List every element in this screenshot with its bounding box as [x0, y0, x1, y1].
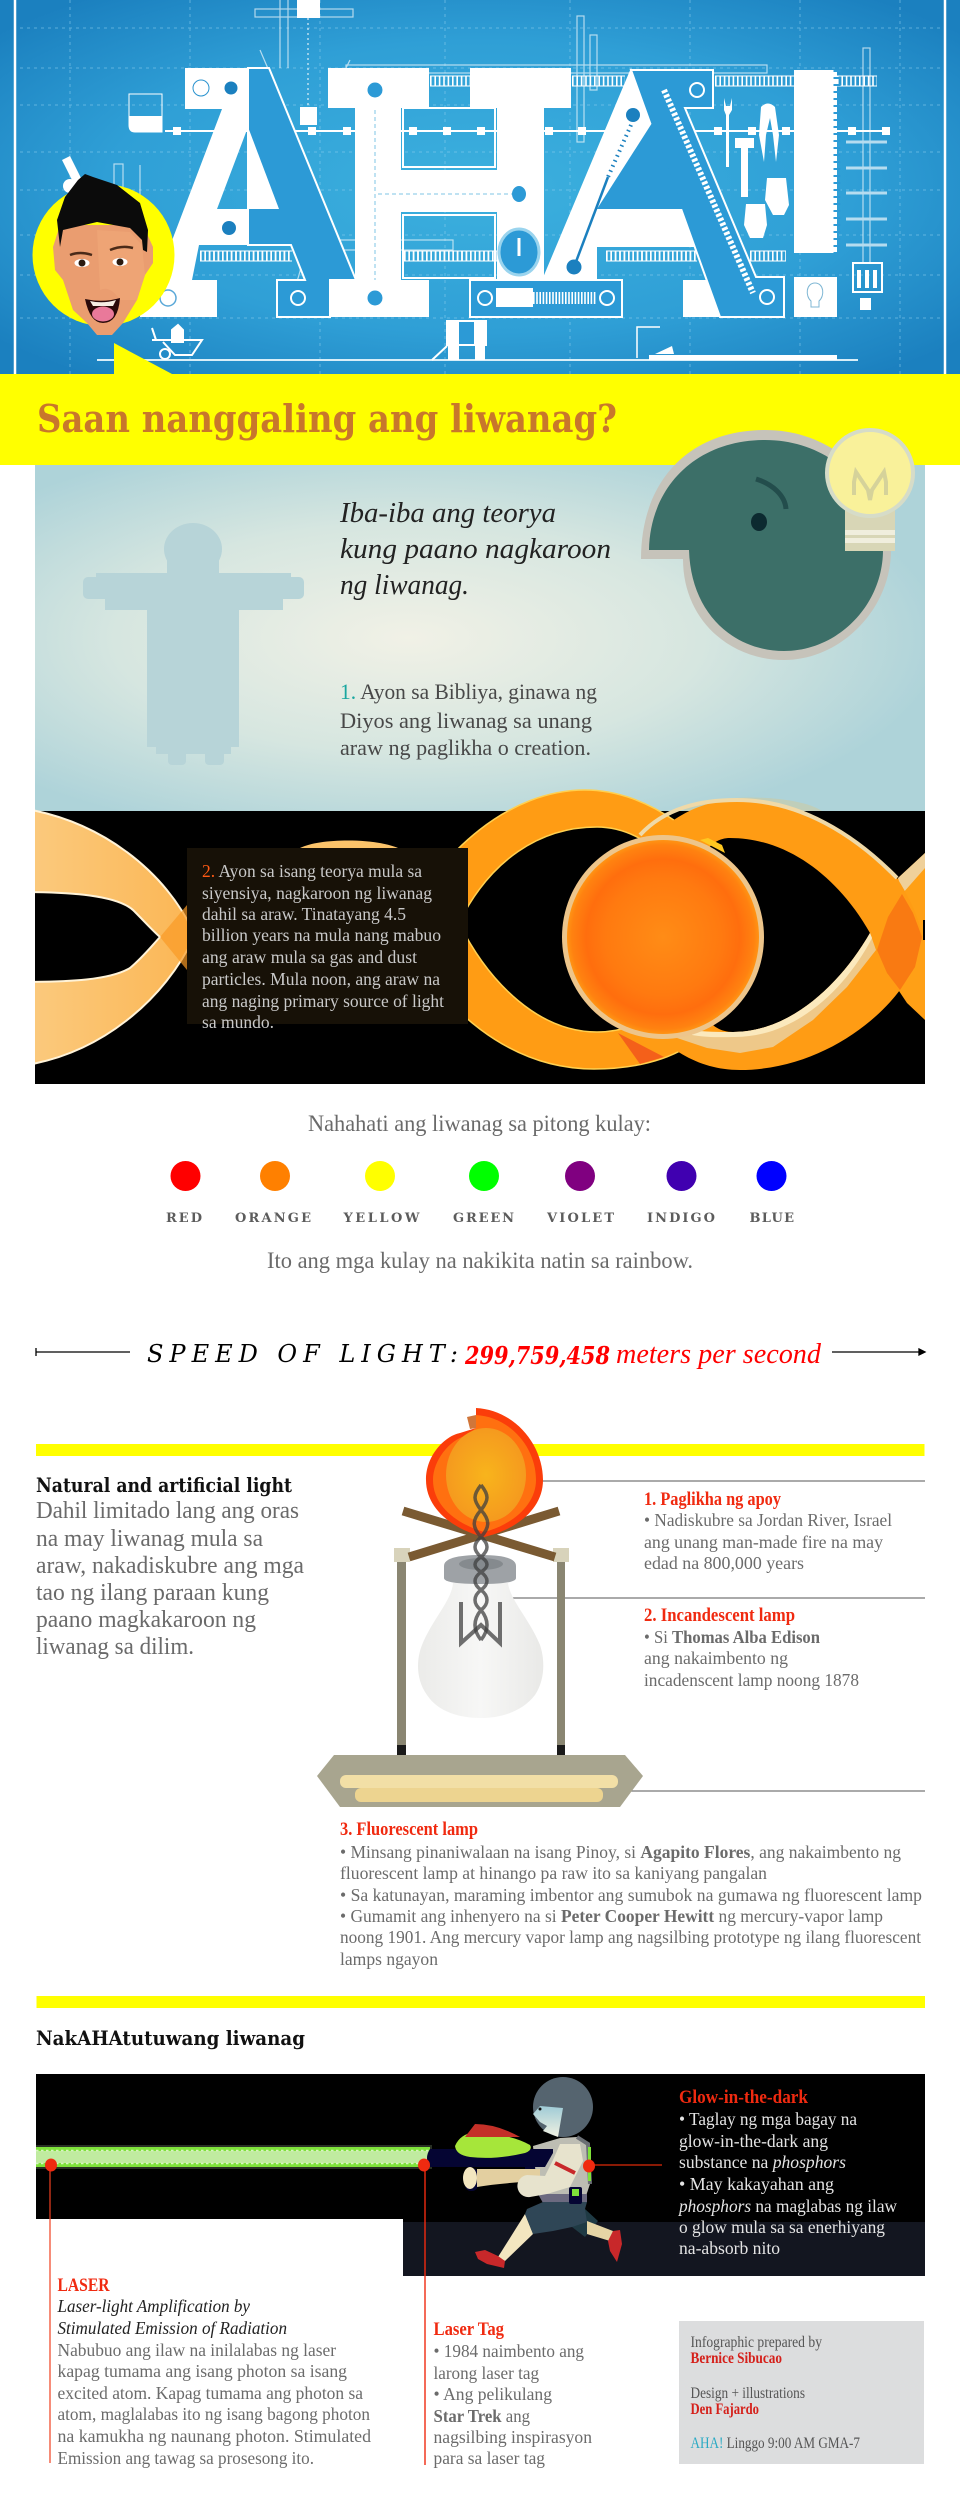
- text: 2 incandescent lamp: • Si Thomas Alba Edison: [644, 1627, 820, 1647]
- text: 2 incandescent lamp: ang nakaimbento ng: [644, 1648, 788, 1668]
- text: theory 1: [340, 679, 597, 760]
- text: 2 incandescent lamp: [644, 1605, 859, 1690]
- text: glow-in-the-dark: substance na phosphors: [679, 2152, 846, 2172]
- sticks: [403, 1511, 559, 1557]
- text: glow-in-the-dark: phosphors na maglabas ng ilaw: [677, 2196, 897, 2216]
- text: laser tag: • Ang pelikulang: [434, 2384, 552, 2404]
- text: laser: excited atom. Kapag tumama ang photon sa: [58, 2383, 363, 2403]
- text: glow-in-the-dark: o glow mula sa sa enerhiyang: [679, 2217, 885, 2237]
- icon: tools: [724, 98, 789, 238]
- text: theory 2: ang araw mula sa gas and dust: [202, 947, 417, 967]
- text: glow-in-the-dark: [677, 2087, 897, 2258]
- text: theory 2: dahil sa araw. Tinatayang 4.5: [202, 904, 406, 924]
- text: 1 paglikha ng apoy: [644, 1489, 892, 1573]
- text: 1 paglikha ng apoy: 1. Paglikha ng apoy: [644, 1489, 781, 1510]
- text: 3 fluorescent lamp: 3. Fluorescent lamp: [340, 1819, 478, 1840]
- pointer: glow-in-the-dark: [583, 2160, 662, 2172]
- colour: green: [453, 1161, 514, 1226]
- text: natural and artificial light: [36, 1473, 304, 1660]
- text: laser: na kamukha ng naunang photon. Stimulated: [58, 2426, 371, 2446]
- text: natural and artificial light: Natural and artificial light: [36, 1473, 293, 1497]
- panel: Bible theory: [35, 465, 925, 811]
- text: theory 2: siyensiya, nagkaroon ng liwanag: [202, 883, 432, 903]
- text: glow-in-the-dark: • May kakayahan ang: [679, 2174, 834, 2194]
- top pulley block: [297, 0, 320, 125]
- text: laser: LASER: [58, 2275, 110, 2296]
- text: theory 2: sa mundo.: [202, 1012, 274, 1032]
- text: laser tag: nagsilbing inspirasyon: [434, 2427, 592, 2447]
- speed of light line: [36, 1338, 925, 1370]
- panel: credits: AHA! Linggo 9:00 AM GMA-7: [690, 2435, 860, 2452]
- heading: nakahatutuwang liwanag: NakAHAtutuwang liwanag: [36, 2026, 305, 2050]
- icon: profile head with light bulb: [641, 430, 913, 660]
- text: speed value: 299,759,458: [464, 1341, 610, 1370]
- stone base with fluorescent tubes: [317, 1755, 643, 1807]
- text: laser: atom, maglalabas ito ng isang bagong photon: [58, 2404, 370, 2424]
- text: laser tag: para sa laser tag: [434, 2448, 545, 2468]
- pointer: laser tag: [418, 2158, 430, 2465]
- title: Saan nanggaling ang liwanag?: [37, 396, 617, 441]
- panel: laser tag illustration: [36, 2074, 925, 2276]
- text: theory 1: Diyos ang liwanag sa unang: [340, 708, 592, 733]
- heading: theories: ng liwanag.: [340, 569, 469, 601]
- illustration: orange rings and sun: [20, 790, 925, 1070]
- colour: orange: ORANGE: [235, 1211, 311, 1226]
- colour: blue: [750, 1161, 794, 1226]
- panel: credits: Den Fajardo: [690, 2401, 759, 2418]
- text: natural and artificial light: na may liwanag mula sa: [36, 1526, 263, 1552]
- text: 3 fluorescent lamp: • Minsang pinaniwalaan na isang Pinoy, si Agapito Flores, ang nakaimbento ng: [340, 1842, 901, 1862]
- text: glow-in-the-dark: glow-in-the-dark ang: [679, 2131, 828, 2151]
- exclamation ruler: [794, 70, 837, 317]
- text: theory 1: araw ng paglikha o creation.: [340, 735, 591, 760]
- text: laser: kapag tumama ang isang photon sa isang: [58, 2361, 347, 2381]
- text: 2 incandescent lamp: 2. Incandescent lamp: [644, 1605, 795, 1626]
- text: natural and artificial light: araw, nakadiskubre ang mga: [36, 1553, 304, 1579]
- text: 3 fluorescent lamp: lamps ngayon: [340, 1949, 438, 1969]
- colour: indigo: [647, 1161, 715, 1226]
- colour: red: [166, 1161, 202, 1226]
- yellow divider: [36, 1996, 925, 2008]
- text: laser: Stimulated Emission of Radiation: [58, 2318, 287, 2338]
- text: 2 incandescent lamp: incadenscent lamp noong 1878: [644, 1670, 859, 1690]
- text: laser tag: Laser Tag: [434, 2319, 504, 2340]
- icon: Christ silhouette: [83, 523, 304, 765]
- text: natural and artificial light: Dahil limitado lang ang oras: [36, 1498, 299, 1524]
- text: laser: Nabubuo ang ilaw na inilalabas ng laser: [58, 2340, 336, 2360]
- laser beam: [36, 2145, 432, 2169]
- letter A second: [542, 68, 784, 317]
- icon: beaker: [129, 94, 162, 132]
- text: glow-in-the-dark: Glow-in-the-dark: [679, 2087, 808, 2108]
- text: 3 fluorescent lamp: fluorescent lamp at hinango pa raw ito sa kaniyang pangalan: [340, 1863, 767, 1883]
- text: speed unit: meters per second: [616, 1338, 821, 1370]
- text box: [187, 848, 468, 1032]
- panel: credits: Bernice Sibucao: [690, 2350, 782, 2367]
- text: natural and artificial light: liwanag sa dilim.: [36, 1634, 194, 1660]
- colour: violet: [546, 1161, 614, 1226]
- text: laser tag: larong laser tag: [434, 2363, 539, 2383]
- colour: orange: [235, 1161, 311, 1226]
- text: 1 paglikha ng apoy: • Nadiskubre sa Jordan River, Israel: [644, 1510, 892, 1530]
- heading: theories: kung paano nagkaroon: [340, 533, 611, 565]
- text: theory 2: billion years na mula nang mabuo: [202, 925, 441, 945]
- pointer: laser: [45, 2158, 57, 2463]
- swimmer and diving board: [637, 327, 837, 360]
- colour: yellow: YELLOW: [342, 1211, 420, 1226]
- text: theory 2: ang naging primary source of light: [202, 991, 444, 1011]
- hero: AHA blueprint header: [0, 0, 960, 374]
- text: speed label: SPEED OF LIGHT:: [147, 1340, 458, 1368]
- yellow title band: [0, 374, 960, 465]
- text: glow-in-the-dark: • Taglay ng mga bagay na: [679, 2109, 857, 2129]
- colour: green: GREEN: [453, 1211, 514, 1226]
- host portrait with speech bubble: [32, 174, 174, 374]
- icon: flame: [426, 1408, 543, 1537]
- text: theory 2: 2. Ayon sa isang teorya mula sa: [202, 861, 422, 881]
- text: theory 1: 1. Ayon sa Bibliya, ginawa ng: [340, 679, 597, 704]
- icon: elevator: [853, 263, 882, 310]
- center machine: [432, 320, 487, 360]
- text: 3 fluorescent lamp: • Gumamit ang inhenyero na si Peter Cooper Hewitt ng mercury-vapor lamp: [340, 1906, 883, 1926]
- colour: indigo: INDIGO: [647, 1211, 715, 1226]
- text: 1 paglikha ng apoy: ang unang man-made fire na may: [644, 1532, 883, 1552]
- icon: light bulb: [418, 1485, 543, 1718]
- arrow: left: [36, 1348, 130, 1356]
- text: 1 paglikha ng apoy: edad na 800,000 years: [644, 1553, 804, 1573]
- panel: credits: Design + illustrations: [690, 2385, 805, 2402]
- text: 3 fluorescent lamp: [340, 1819, 922, 1969]
- text: natural and artificial light: tao ng ilang paraan kung: [36, 1580, 269, 1606]
- panel: credits: [679, 2321, 924, 2464]
- text: natural and artificial light: paano magkakaroon ng: [36, 1607, 256, 1633]
- legend: seven colours: [166, 1161, 794, 1226]
- text: laser tag: [434, 2319, 592, 2468]
- text: theory 2: particles. Mula noon, ang araw na: [202, 969, 440, 989]
- text: laser tag: • 1984 naimbento ang: [434, 2341, 584, 2361]
- text: seven colours intro: Nahahati ang liwanag sa pitong kulay:: [308, 1111, 651, 1136]
- yellow divider: [36, 1444, 924, 1456]
- heading: theories: Iba-iba ang teorya: [339, 497, 556, 529]
- text: 3 fluorescent lamp: • Sa katunayan, maraming imbentor ang sumubok na gumawa ng fluorescent lamp: [340, 1885, 922, 1905]
- text: laser: Laser-light Amplification by: [57, 2296, 250, 2316]
- panel: Sun theory: [20, 790, 925, 1084]
- posts: [394, 1548, 569, 1755]
- colour: red: RED: [166, 1211, 202, 1226]
- text: laser: [57, 2275, 371, 2468]
- icon: cart with cat: [152, 325, 202, 359]
- heading: theories: [339, 497, 611, 601]
- icon: pencil: [62, 156, 82, 193]
- text: rainbow note: Ito ang mga kulay na nakikita natin sa rainbow.: [267, 1248, 693, 1273]
- colour: violet: VIOLET: [546, 1211, 614, 1226]
- colour: blue: BLUE: [750, 1211, 794, 1226]
- panel: credits: Infographic prepared by: [690, 2334, 822, 2351]
- text: theory 2: [202, 861, 444, 1032]
- text: 3 fluorescent lamp: noong 1901. Ang mercury vapor lamp ang nagsilbing prototype ng ilang fluorescent: [340, 1927, 921, 1947]
- arrow: right: [832, 1349, 925, 1355]
- illustration: evolution of light lamp: [317, 1408, 643, 1807]
- letter H: [328, 68, 622, 317]
- illustration: running kid with laser gun: [427, 2077, 622, 2268]
- letter A: [140, 68, 356, 317]
- colour: yellow: [342, 1161, 420, 1226]
- text: glow-in-the-dark: na-absorb nito: [679, 2238, 780, 2258]
- text: laser: Emission ang tawag sa prosesong ito.: [58, 2448, 314, 2468]
- text: laser tag: Star Trek ang: [434, 2406, 530, 2426]
- halo above sun ring: [683, 798, 822, 811]
- leader lines: [509, 1481, 925, 1791]
